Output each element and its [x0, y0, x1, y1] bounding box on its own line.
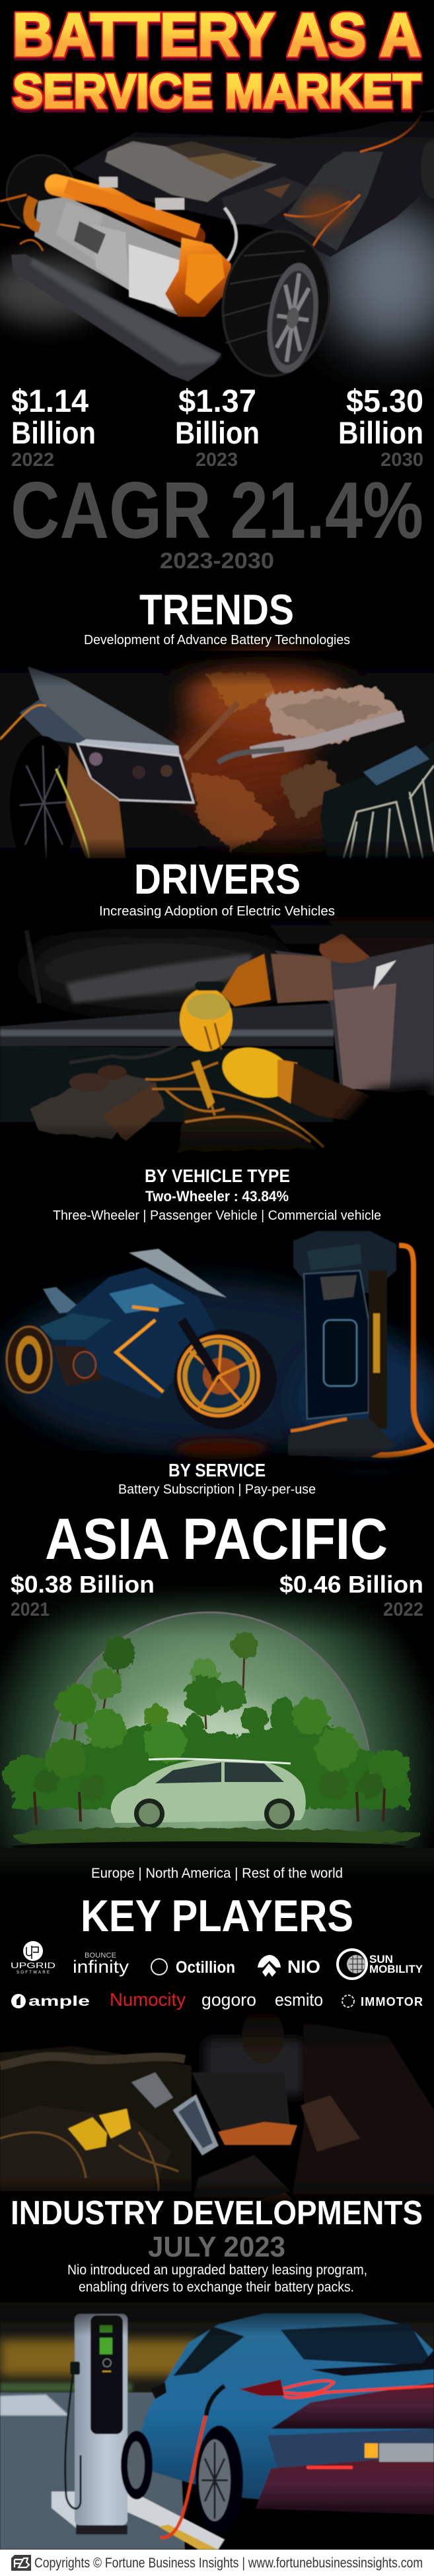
- text: other regions: Europe | North America | Rest of the world: [91, 1866, 343, 1881]
- image: green car in forest dome: [0, 1584, 434, 1881]
- text: driver description: Increasing Adoption of Electric Vehicles: [99, 904, 335, 919]
- CAGR period: 2023-2030: [160, 548, 274, 574]
- segment: by vehicle type: Three-Wheeler | Passenger Vehicle | Commercial vehicle: [53, 1208, 381, 1223]
- logos: key players: [11, 1941, 423, 2010]
- segment: by service: BY SERVICE: [168, 1460, 266, 1480]
- image: EV chassis with battery: [0, 109, 434, 383]
- stat: 2030 market size: Billion: [338, 415, 423, 450]
- logo: Upgrid Software: [11, 1941, 55, 1975]
- segment: by vehicle type: [53, 1166, 381, 1223]
- image: mechanic working on battery wiring: [0, 904, 434, 1168]
- stat: 2023 market size: 2023: [196, 449, 238, 471]
- stat: Asia Pacific 2021: 2021: [11, 1599, 50, 1620]
- icon: Fortune Business Insights logo: [11, 2555, 31, 2571]
- stat: 2022 market size: 2022: [11, 449, 54, 471]
- logo: Bounce Infinity: infinity: [73, 1957, 129, 1977]
- heading: Asia Pacific: ASIA PACIFIC: [45, 1506, 388, 1571]
- stat: 2022 market size: [11, 384, 96, 471]
- logo: Numocity: Numocity: [110, 1989, 186, 2010]
- text: trend description: Development of Advance Battery Technologies: [84, 633, 350, 647]
- stat: Asia Pacific 2022: $0.46 Billion: [279, 1571, 423, 1598]
- heading: trends: TRENDS: [139, 585, 294, 634]
- logo: Esmito: esmito: [275, 1990, 323, 2010]
- stat: 2030 market size: [338, 384, 423, 471]
- logo: Sun Mobility: MOBILITY: [369, 1963, 423, 1975]
- text: development description: Nio introduced an upgraded battery leasing program,: [67, 2262, 367, 2278]
- stat: Asia Pacific 2021: [11, 1571, 155, 1620]
- stat: 2030 market size: $5.30: [346, 384, 423, 419]
- image: blue EV at charging station: [0, 2290, 434, 2550]
- image: car with open hood and glowing engine: [0, 650, 434, 875]
- segment: by vehicle type: Two-Wheeler : 43.84%: [145, 1188, 289, 1205]
- stat: Asia Pacific 2022: [279, 1571, 423, 1620]
- title: SERVICE MARKET: [13, 65, 421, 118]
- segment: by service: Battery Subscription | Pay-per-use: [118, 1482, 316, 1497]
- segment: by vehicle type: BY VEHICLE TYPE: [145, 1166, 290, 1186]
- stat: 2023 market size: [175, 384, 260, 471]
- stat: 2023 market size: $1.37: [178, 384, 256, 419]
- stat: 2022 market size: $1.14: [11, 384, 89, 419]
- heading: drivers: DRIVERS: [134, 855, 301, 903]
- text: development description: [67, 2262, 367, 2295]
- logo: Octillion: [151, 1958, 235, 1977]
- logo: Ample: [11, 1994, 90, 2009]
- image: electric motorcycle and charger: [0, 1231, 434, 1470]
- text: development description: enabling drivers to exchange their battery packs.: [79, 2280, 354, 2295]
- logo: Immotor: IMMOTOR: [361, 1995, 423, 2008]
- logo: Ample: ample: [28, 1994, 90, 2009]
- logo: NIO: [258, 1955, 320, 1977]
- logo: Sun Mobility: SUN: [369, 1953, 393, 1965]
- logo: NIO: NIO: [287, 1957, 320, 1977]
- date: July 2023: JULY 2023: [148, 2231, 285, 2263]
- heading: key players: KEY PLAYERS: [81, 1891, 353, 1941]
- segment: by service: [118, 1460, 316, 1497]
- logo: Bounce Infinity: BOUNCE: [85, 1952, 116, 1960]
- stat: Asia Pacific 2022: 2022: [383, 1599, 423, 1620]
- title: [13, 1, 421, 118]
- logo: Gogoro: gogoro: [201, 1990, 256, 2010]
- image: mechanic with tablet at engine bay: [0, 2006, 434, 2204]
- footer bar: [0, 2550, 434, 2576]
- logo: Upgrid Software: UPGRID: [11, 1961, 55, 1970]
- logo: Octillion: Octillion: [176, 1958, 235, 1977]
- stat: 2030 market size: 2030: [380, 449, 423, 471]
- logo: Upgrid Software: SOFTWARE: [17, 1971, 50, 1975]
- stat: 2023 market size: Billion: [175, 415, 260, 450]
- logo: Sun Mobility: [338, 1950, 423, 1979]
- stat: 2022 market size: Billion: [11, 415, 96, 450]
- stat: Asia Pacific 2021: $0.38 Billion: [11, 1571, 155, 1598]
